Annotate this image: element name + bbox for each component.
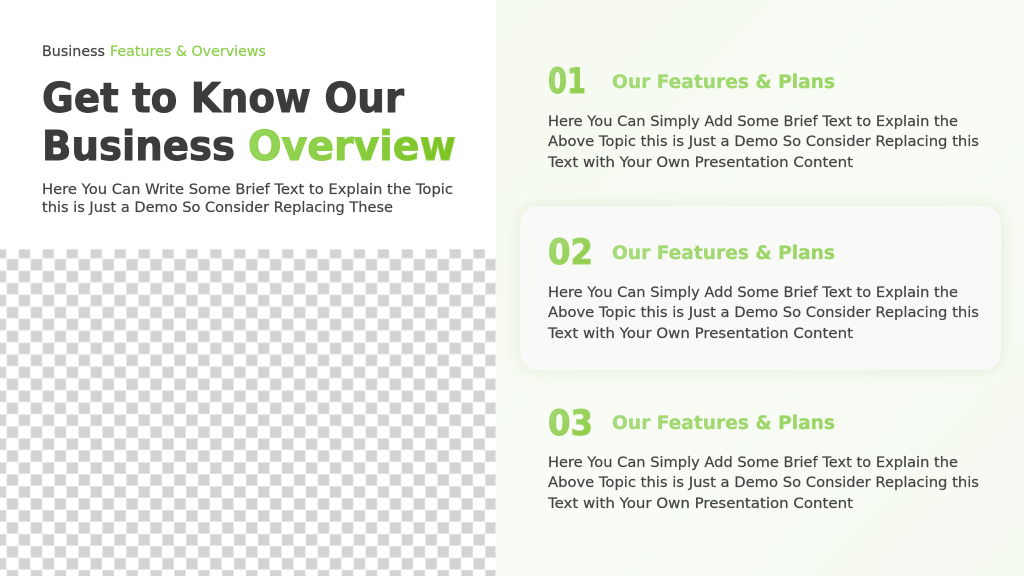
body 01	[547, 114, 979, 171]
number 02: 02	[548, 233, 593, 273]
panel: right features	[496, 0, 1024, 576]
heading 02: Our Features & Plans	[612, 243, 835, 264]
body 01: Above Topic this is Just a Demo So Consider Replacing this	[548, 134, 979, 150]
intro text: this is Just a Demo So Consider Replacing These	[42, 200, 393, 216]
feature 03	[547, 404, 979, 512]
body 02: Text with Your Own Presentation Content	[547, 326, 854, 342]
intro text	[42, 182, 453, 216]
eyebrow label	[42, 44, 266, 60]
body 01: Text with Your Own Presentation Content	[547, 155, 854, 171]
title	[42, 74, 456, 170]
heading 01: Our Features & Plans	[612, 72, 835, 93]
body 03	[547, 455, 979, 512]
intro text: Here You Can Write Some Brief Text to Explain the Topic	[42, 182, 453, 198]
body 01: Here You Can Simply Add Some Brief Text to Explain the	[548, 114, 958, 130]
body 02: Here You Can Simply Add Some Brief Text to Explain the	[548, 285, 958, 301]
eyebrow label: Features & Overviews	[110, 44, 266, 60]
number 03: 03	[548, 404, 593, 444]
eyebrow label: Business	[42, 44, 105, 60]
panel background	[496, 0, 1024, 576]
body 02: Above Topic this is Just a Demo So Consider Replacing this	[548, 305, 979, 321]
card background	[520, 206, 1001, 370]
number 01: 01	[548, 62, 586, 102]
body 03: Above Topic this is Just a Demo So Consider Replacing this	[548, 475, 979, 491]
panel: left intro	[0, 44, 496, 576]
feature 02 highlighted card	[520, 206, 1001, 370]
title: Overview	[248, 122, 456, 170]
body 03: Here You Can Simply Add Some Brief Text to Explain the	[548, 455, 958, 471]
image placeholder: transparency checkerboard	[0, 249, 496, 576]
heading 03: Our Features & Plans	[612, 413, 835, 434]
body 02	[547, 285, 979, 342]
title: Get to Know Our	[42, 74, 405, 122]
body 03: Text with Your Own Presentation Content	[547, 496, 854, 512]
feature 01	[547, 62, 979, 171]
title: Business	[42, 122, 235, 170]
